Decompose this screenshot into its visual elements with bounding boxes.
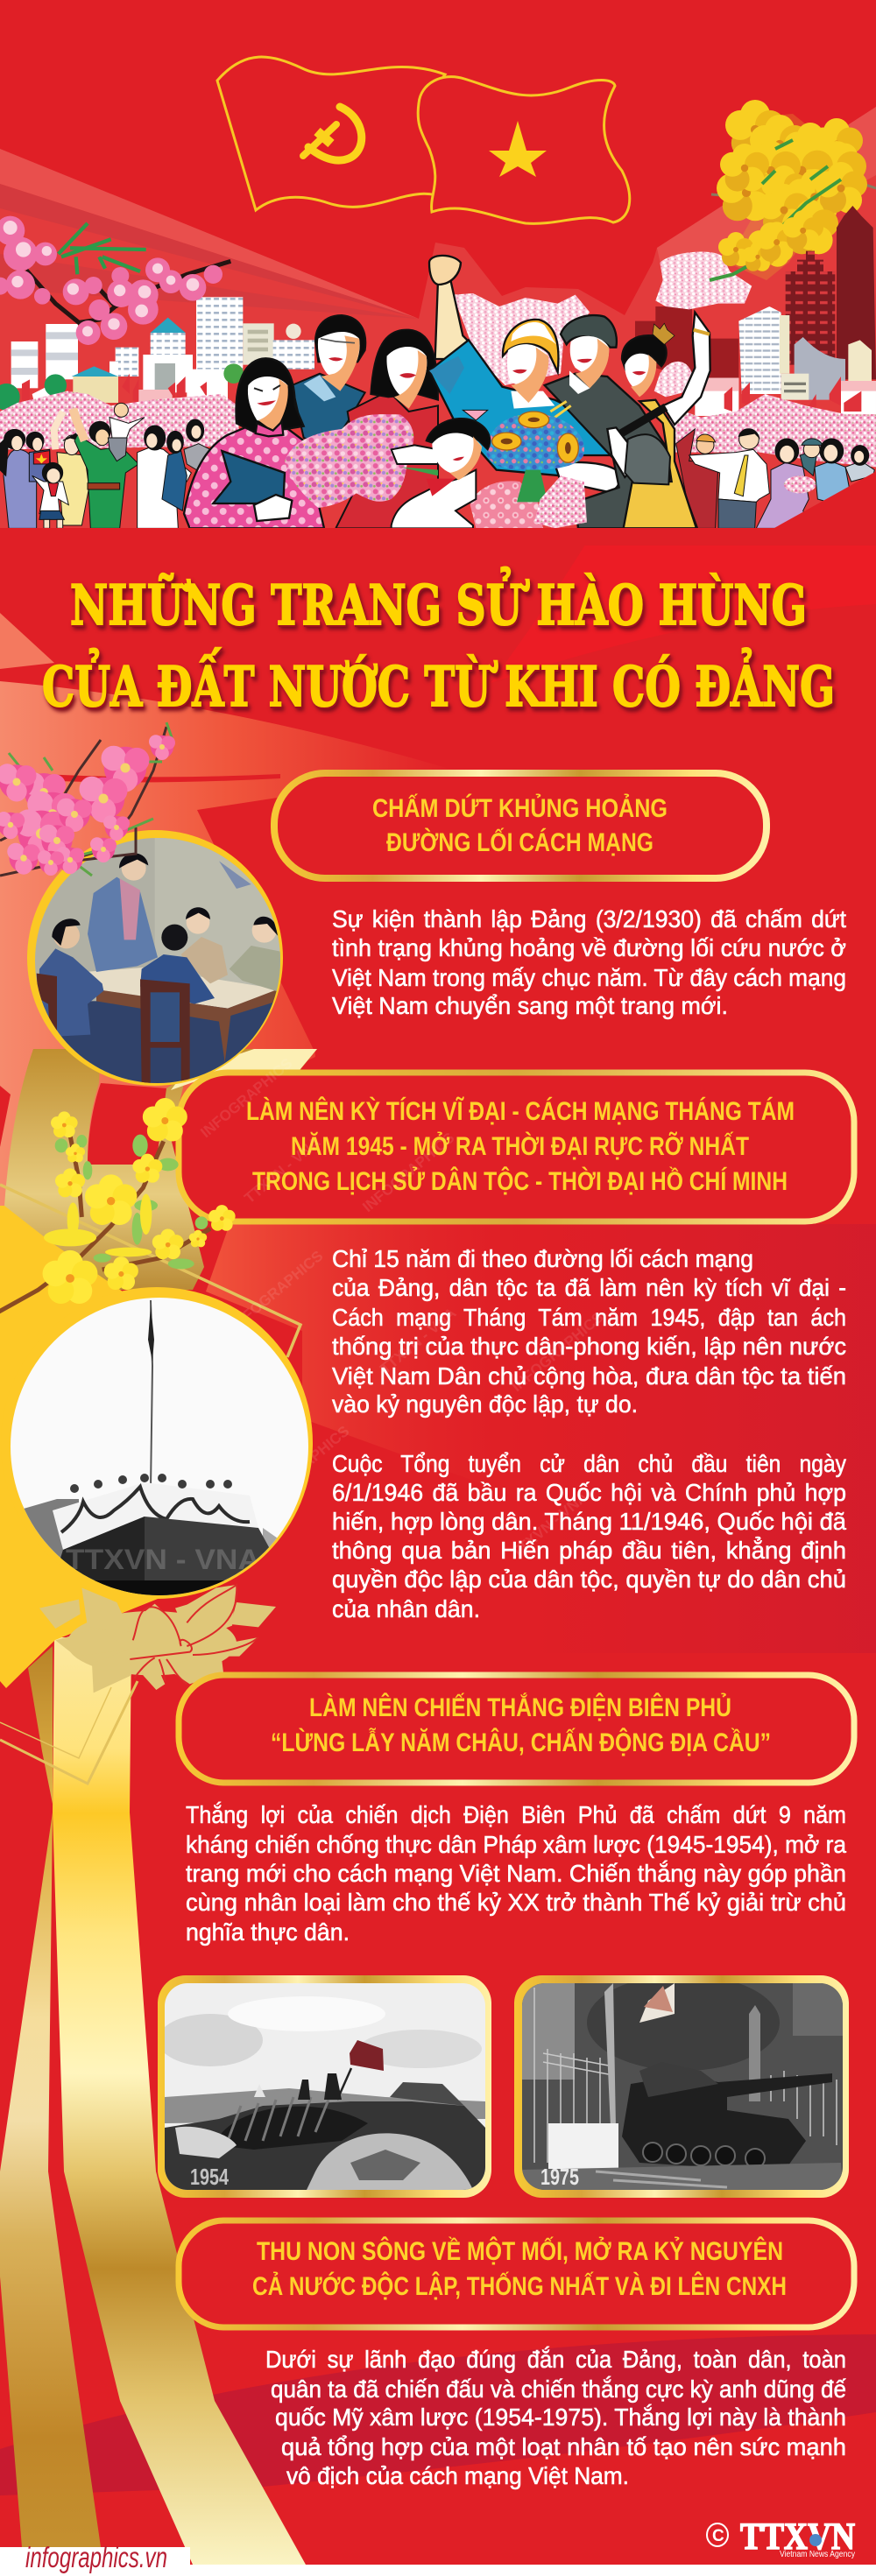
- gold ribbons: [0, 1049, 317, 2565]
- body text 2: của Đảng, dân tộc ta đã làm nên kỳ tích vĩ đại -: [332, 1274, 846, 1301]
- body text 2: 6/1/1946 đã bầu ra Quốc hội và Chính phủ hợp: [332, 1479, 846, 1506]
- man with yellow tie: [689, 429, 769, 528]
- city left, in zoom coordinates: [0, 216, 438, 528]
- body text 4: [265, 2346, 846, 2489]
- watermarks: TTXVN - VNA: [241, 1134, 323, 1207]
- mai branch top right: [688, 100, 876, 280]
- mai blossom branch: [0, 1098, 236, 1312]
- women in grey and blue: [162, 419, 210, 510]
- green soldier: [73, 409, 138, 528]
- right blossom field: [668, 394, 876, 467]
- right crowd: [676, 429, 874, 528]
- peach blossom branch: [0, 722, 175, 876]
- pill 2: NĂM 1945 - MỞ RA THỜI ĐẠI RỰC RỠ NHẤT: [291, 1131, 749, 1161]
- folder: [213, 451, 285, 503]
- girl: [392, 410, 490, 528]
- blossoms behind figures: [453, 293, 590, 385]
- photo frame: 1975: [514, 1974, 849, 2198]
- bouquet pink: [285, 414, 413, 508]
- hero backdrop rays: [0, 107, 876, 528]
- pink tree: [655, 252, 752, 309]
- worker in red: [676, 429, 718, 528]
- TTXVN logo: [707, 2516, 855, 2559]
- outer left strip: [0, 1086, 11, 1147]
- hat man: [800, 439, 823, 475]
- body text 4: vô địch của cách mạng Việt Nam.: [286, 2462, 629, 2489]
- centre ribbon: [53, 1637, 306, 2565]
- body text 1: tình trạng khủng hoảng về đường lối cứu nước ở: [332, 934, 846, 961]
- yellow dress woman: [54, 412, 89, 525]
- body text 3: trang mới cho cách mạng Việt Nam. Chiến thắng này góp phần: [186, 1860, 846, 1887]
- watermarks: TTXVN - VNA: [508, 1489, 590, 1561]
- girl pioneer: [32, 462, 68, 528]
- red inset: [88, 1083, 166, 1165]
- crowned woman: [607, 313, 710, 528]
- watermarks: INFOGRAPHICS: [197, 1055, 295, 1141]
- body text 3: cùng nhân loại làm cho thế kỷ XX trở thành Thế kỷ giải trừ chủ: [186, 1889, 846, 1916]
- woman in pink ao dai: [184, 358, 324, 528]
- woman in red: [336, 330, 438, 528]
- watermarks: [197, 1055, 606, 1561]
- flower bouquet: [486, 412, 584, 502]
- watermarks: INFOGRAPHICS: [254, 1423, 352, 1509]
- body text 3: kháng chiến chống thực dân Pháp xâm lược (1945-1954), mở ra: [186, 1831, 847, 1858]
- pill 4: [179, 2221, 854, 2327]
- lower bouquet bits: [534, 475, 587, 528]
- upper gold band: [4, 1049, 317, 1290]
- pill 3: “LỪNG LẪY NĂM CHÂU, CHẤN ĐỘNG ĐỊA CẦU”: [271, 1728, 771, 1757]
- watermarks: INFOGRAPHICS: [508, 1309, 606, 1395]
- photo: founding of the Party: [27, 830, 286, 1092]
- mai sprig: [710, 210, 823, 280]
- blue dress woman: [815, 439, 850, 505]
- site name: infographics.vn: [25, 2541, 167, 2573]
- TTXVN logo: Vietnam News Agency: [780, 2550, 855, 2559]
- hammer and sickle: [303, 107, 362, 160]
- body text 4: quốc Mỹ xâm lược (1954-1975). Thắng lợi này là thành: [275, 2404, 846, 2431]
- buildings: [32, 297, 314, 405]
- body text 2: vào kỷ nguyên độc lập, tự do.: [332, 1390, 638, 1418]
- corner red wedge: [774, 471, 876, 528]
- watermarks: INFOGRAPHICS: [228, 1248, 326, 1334]
- TTXVN logo: TTXVN: [740, 2516, 855, 2558]
- smokestacks: [11, 324, 78, 388]
- yellow panel behind photo 2: [0, 1206, 158, 1688]
- body text 2: của nhân dân.: [332, 1595, 480, 1622]
- dark towers: [635, 206, 876, 379]
- footer strip: [0, 2541, 876, 2576]
- body text 2: Chỉ 15 năm đi theo đường lối cách mạng: [332, 1245, 753, 1272]
- pill 1: ĐƯỜNG LỐI CÁCH MẠNG: [386, 827, 653, 857]
- pill 2: [179, 1073, 854, 1221]
- pill 3: LÀM NÊN CHIẾN THẮNG ĐIỆN BIÊN PHỦ: [309, 1693, 731, 1722]
- body text 3: nghĩa thực dân.: [186, 1918, 350, 1946]
- soldier: [545, 315, 672, 528]
- person with flag: [26, 432, 51, 482]
- body text 4: quả tổng hợp của một loạt nhân tố tạo nên sức mạnh: [281, 2433, 846, 2460]
- rifle: [616, 407, 666, 436]
- pale towers: [695, 306, 876, 416]
- pill 1: CHẤM DỨT KHỦNG HOẢNG: [372, 793, 668, 823]
- photo frame: 1954: 1954: [190, 2164, 229, 2190]
- lilac woman: [756, 439, 816, 528]
- body text 3: [186, 1801, 847, 1946]
- white ao dai woman: [138, 426, 191, 528]
- pill 3: [179, 1675, 854, 1783]
- body text 4: Dưới sự lãnh đạo đúng đắn của Đảng, toàn dân, toàn: [265, 2346, 846, 2373]
- left crowd: [0, 403, 210, 528]
- raised arm and fist: [429, 256, 469, 359]
- flag: vietnam: [418, 77, 630, 223]
- photo frame: 1954: [158, 1975, 491, 2198]
- cream ribbon strip: [171, 1049, 317, 1090]
- gold lotus: [39, 1585, 276, 1693]
- body text 2: [332, 1245, 847, 1622]
- body text 2: thống trị của thực dân-phong kiến, lập nên nước: [332, 1333, 846, 1360]
- TTXVN logo: C: [712, 2527, 724, 2545]
- watermarks: TTXVN - VNA: [377, 1305, 459, 1377]
- hero illustration: [0, 57, 876, 545]
- body text 2: hiến, hợp lòng dân. Tháng 11/1946, Quốc hội đã: [332, 1508, 847, 1535]
- body text 4: quân ta đã chiến đấu và chiến thắng cực kỳ anh dũng đế: [271, 2375, 846, 2403]
- body text 1: Sự kiện thành lập Đảng (3/2/1930) đã chấm dứt: [332, 905, 846, 933]
- pill 4: THU NON SÔNG VỀ MỘT MỐI, MỞ RA KỶ NGUYÊN: [257, 2236, 783, 2266]
- body text 2: thông qua bản Hiến pháp đầu tiên, khẳng định: [332, 1536, 846, 1564]
- city right and central figures, in zoom coordinates: [392, 206, 876, 528]
- blossom field: [0, 391, 239, 449]
- flag: party: [217, 57, 447, 210]
- peach branch: [0, 216, 230, 345]
- roses: [470, 481, 543, 528]
- far right woman: [845, 446, 874, 482]
- pill 1: [274, 773, 766, 878]
- title: [42, 566, 835, 719]
- man with helmet: [429, 320, 619, 492]
- watermarks: INFOGRAPHICS: [359, 1130, 457, 1215]
- trees and flags: [0, 363, 244, 411]
- left ribbon: [28, 1646, 53, 1804]
- star: [489, 121, 547, 177]
- woman's hand and bouquet stems: [392, 445, 438, 475]
- body text 2: Việt Nam Dân chủ cộng hòa, đưa dân tộc ta tiến: [332, 1362, 846, 1390]
- body text 1: Việt Nam chuyển sang một trang mới.: [332, 992, 728, 1019]
- child on shoulders: [108, 403, 145, 461]
- body text 2: quyền độc lập của dân tộc, quyền tự do dân chủ: [332, 1566, 846, 1593]
- hero bottom band: [0, 528, 876, 545]
- thin gold lines: [0, 1185, 300, 1784]
- body text 1: [332, 905, 846, 1019]
- man with glasses: [292, 315, 365, 449]
- sleeve: [625, 434, 670, 484]
- photo: flag raising 1945: TTXVN - VNA: [66, 1544, 260, 1575]
- blossoms by crown woman: [654, 362, 692, 397]
- photo: flag raising 1945: [0, 1287, 315, 1611]
- photo frame: 1975: 1975: [540, 2164, 579, 2190]
- body text 1: Việt Nam trong mấy chục năm. Từ đây cách mạng: [332, 964, 846, 991]
- woman in blue ao dai: [0, 429, 37, 528]
